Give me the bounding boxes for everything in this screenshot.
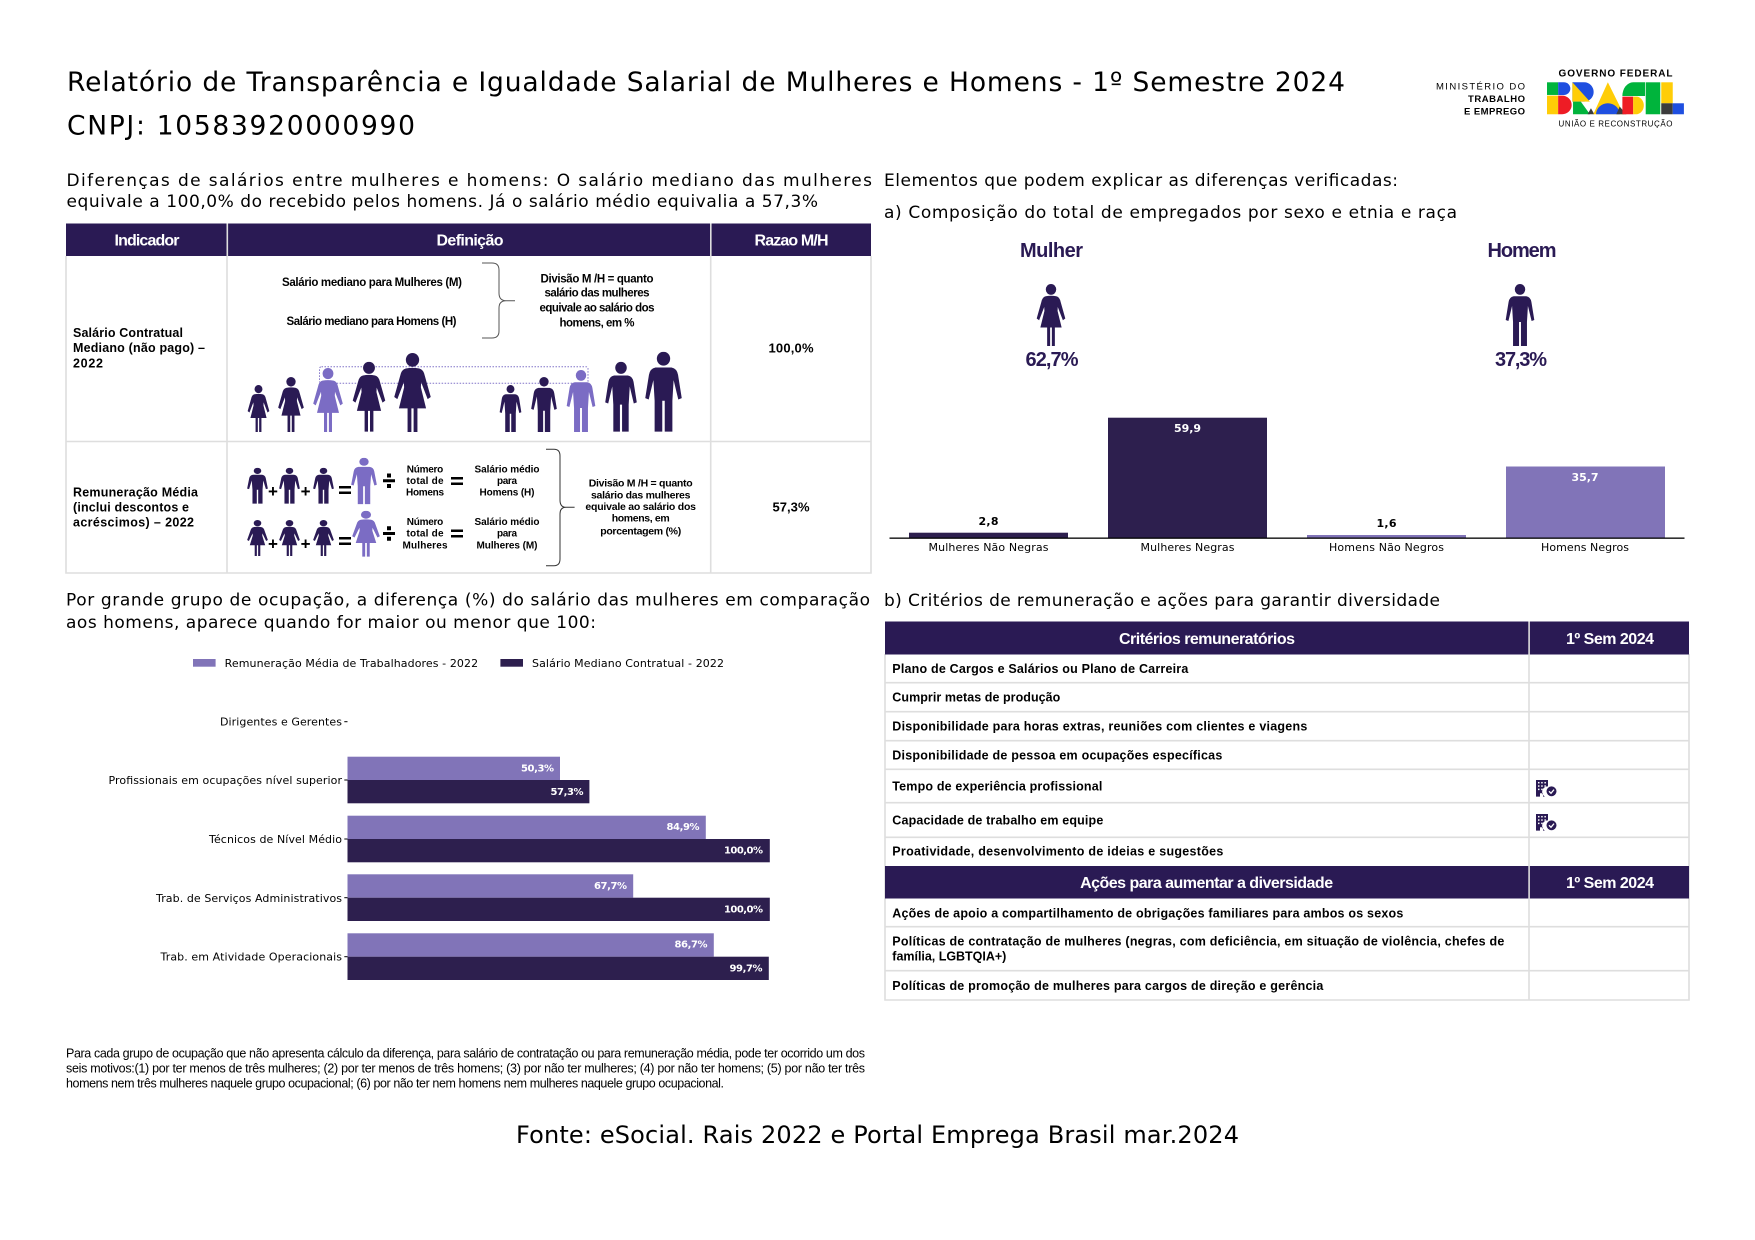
definition note	[585, 478, 696, 537]
formula: women	[247, 511, 539, 557]
header: ações para aumentar a diversidade	[885, 866, 1689, 898]
formula: men: Homens (H)	[480, 488, 534, 499]
legend	[193, 657, 724, 670]
row: remuneração média indicator: Remuneração Média	[73, 486, 199, 500]
brace	[482, 263, 515, 338]
panel: homem share: Homem	[1488, 240, 1556, 262]
header: critérios remuneratórios: Critérios remuneratórios	[1119, 631, 1295, 648]
heading: critérios: b) Critérios de remuneração e ações para garantir diversidade	[884, 591, 1440, 611]
formula: men: +	[301, 482, 311, 501]
row: salário contratual indicator: Mediano (não pago) –	[73, 341, 205, 355]
logo: ministério do trabalho e emprego: E EMPREGO	[1464, 106, 1525, 117]
row: atividade operacionais: 99,7%	[730, 963, 762, 974]
formula: men: para	[497, 476, 517, 487]
heading: por grande grupo de ocupação: Por grande grupo de ocupação, a diferença (%) do salário das mulheres em comparação	[66, 591, 870, 611]
panel: homem share	[1488, 240, 1556, 371]
row: salário contratual indicator: 2022	[73, 357, 103, 371]
criteria rows: Tempo de experiência profissional	[892, 779, 1102, 793]
chart: composition bars: Mulheres Não Negras	[928, 541, 1049, 554]
definition note: salário das mulheres	[544, 288, 650, 300]
icon: building check	[1536, 780, 1556, 797]
definition note: equivale ao salário dos	[585, 501, 696, 513]
formula: women: Mulheres (M)	[476, 540, 538, 551]
value: salário contratual: 100,0%	[768, 341, 814, 356]
definition note: homens, em %	[560, 318, 634, 330]
chart: composition bars: 2,8	[978, 515, 998, 528]
formula: men: Número	[407, 465, 443, 476]
formula: men	[247, 458, 539, 504]
row: serviços administrativos: 100,0%	[724, 905, 763, 916]
formula: women: Mulheres	[402, 540, 448, 551]
panel: mulher share: Mulher	[1020, 240, 1083, 262]
title: Relatório de Transparência e Igualdade Salarial de Mulheres e Homens - 1º Semestre 2024	[67, 67, 1345, 98]
row: serviços administrativos: 67,7%	[594, 881, 627, 892]
formula: men: total de	[406, 476, 444, 487]
panel: homem share: 37,3%	[1495, 349, 1547, 371]
formula: women: Salário médio	[474, 517, 540, 528]
brace	[546, 449, 575, 566]
row: salário contratual indicator	[73, 326, 205, 371]
icons: women by salary	[248, 353, 431, 432]
footnote	[66, 1046, 865, 1090]
definition note: salário das mulheres	[591, 490, 691, 502]
dotted median box	[320, 367, 588, 383]
criteria rows: Disponibilidade para horas extras, reuniões com clientes e viagens	[892, 720, 1307, 734]
formula: women: Número	[407, 517, 443, 528]
footnote: seis motivos:(1) por ter menos de três mulheres; (2) por ter menos de três homens; (3) por não ter mulheres; (4) por não ter homens; (5) por não ter três	[66, 1061, 865, 1075]
row: salário contratual indicator: Salário Contratual	[73, 326, 183, 340]
row: serviços administrativos	[155, 874, 770, 921]
row: dirigentes e gerentes: Dirigentes e Gerentes	[220, 716, 342, 728]
criteria rows: Proatividade, desenvolvimento de ideias e sugestões	[892, 844, 1223, 858]
definition note: Divisão M /H = quanto	[540, 274, 654, 286]
formula: women: +	[301, 534, 311, 554]
criteria rows: Plano de Cargos e Salários ou Plano de Carreira	[892, 662, 1189, 676]
formula: men: Salário médio	[474, 465, 540, 476]
row: técnicos: 84,9%	[666, 822, 700, 833]
logo: governo federal brasil: UNIÃO E RECONSTRUÇÃO	[1558, 120, 1672, 129]
header: ações para aumentar a diversidade: Ações para aumentar a diversidade	[1080, 875, 1333, 892]
heading: por grande grupo de ocupação	[66, 591, 870, 633]
definition note	[540, 274, 654, 330]
logo: ministério do trabalho e emprego: MINISTÉRIO DO	[1436, 81, 1525, 92]
table header: Razao M/H	[754, 233, 828, 250]
source: Fonte: eSocial. Rais 2022 e Portal Emprega Brasil mar.2024	[516, 1121, 1239, 1149]
formula: women: para	[497, 529, 517, 540]
heading: elementos: Elementos que podem explicar as diferenças verificadas:	[884, 171, 1398, 191]
panel: mulher share	[1020, 240, 1083, 371]
logo: governo federal brasil: GOVERNO FEDERAL	[1558, 68, 1672, 79]
action rows: Políticas de promoção de mulheres para cargos de direção e gerência	[892, 979, 1324, 993]
panel: mulher share: 62,7%	[1026, 349, 1079, 371]
panel: criteria table	[885, 622, 1689, 1000]
legend: Salário Mediano Contratual - 2022	[532, 657, 724, 670]
panel: indicator table	[66, 224, 871, 573]
icon: man	[1506, 284, 1534, 346]
row: profissionais: 50,3%	[521, 763, 554, 774]
table header: Definição	[436, 233, 504, 250]
heading: elementos: a) Composição do total de empregados por sexo e etnia e raça	[884, 203, 1457, 223]
row: técnicos	[208, 816, 770, 862]
criteria rows: Disponibilidade de pessoa em ocupações específicas	[892, 749, 1222, 763]
chart: composition bars: 35,7	[1572, 471, 1598, 484]
icon: building check	[1536, 814, 1556, 831]
intro text: diferenças de salários: equivale a 100,0% do recebido pelos homens. Já o salário médio equivalia a 57,3%	[66, 192, 818, 212]
row: técnicos: Técnicos de Nível Médio	[208, 833, 342, 846]
footnote: Para cada grupo de ocupação que não apresenta cálculo da diferença, para salário de contratação ou para remuneração média, pode ter ocorrido um dos	[66, 1046, 865, 1060]
definition note: homens, em	[612, 513, 670, 525]
row: profissionais: 57,3%	[550, 787, 584, 798]
action rows: Ações de apoio a compartilhamento de obrigações familiares para ambos os sexos	[892, 906, 1403, 920]
formula: men: +	[268, 482, 278, 501]
chart: occupation horizontal bars	[108, 657, 770, 980]
criteria rows: Capacidade de trabalho em equipe	[892, 813, 1103, 827]
title	[67, 67, 1345, 142]
title: CNPJ: 10583920000990	[67, 110, 415, 142]
salário mediano labels: Salário mediano para Mulheres (M)	[282, 277, 462, 289]
action rows: família, LGBTQIA+)	[892, 950, 1006, 964]
icon: woman	[1037, 284, 1065, 346]
action rows: Políticas de contratação de mulheres (negras, com deficiência, em situação de violência, chefes de	[892, 934, 1504, 948]
row: remuneração média indicator: (inclui descontos e	[73, 500, 189, 514]
header: ações para aumentar a diversidade: 1º Sem 2024	[1566, 875, 1654, 892]
intro text: diferenças de salários: Diferenças de salários entre mulheres e homens: O salário mediano das mulheres	[66, 171, 872, 191]
logo: ministério do trabalho e emprego: TRABALHO	[1468, 94, 1525, 105]
definition note: Divisão M /H = quanto	[589, 478, 693, 490]
salário mediano labels: Salário mediano para Homens (H)	[286, 316, 457, 328]
row: remuneração média indicator: acréscimos) – 2022	[73, 515, 194, 529]
criteria rows	[892, 662, 1307, 858]
criteria rows: Cumprir metas de produção	[892, 691, 1061, 705]
legend: Remuneração Média de Trabalhadores - 2022	[225, 657, 478, 670]
salário mediano labels	[282, 277, 462, 328]
chart: composition bars	[890, 418, 1684, 554]
action rows	[892, 906, 1504, 993]
value: remuneração média: 57,3%	[772, 500, 810, 515]
chart: composition bars: 1,6	[1376, 517, 1397, 530]
formula: men: Homens	[406, 488, 444, 499]
row: atividade operacionais: 86,7%	[674, 940, 708, 951]
heading: elementos	[884, 171, 1457, 223]
logo: governo federal brasil	[1547, 68, 1684, 129]
row: atividade operacionais: Trab. em Atividade Operacionais	[160, 950, 342, 964]
header: critérios remuneratórios	[885, 622, 1689, 654]
chart: composition bars: 59,9	[1174, 422, 1201, 435]
row: técnicos: 100,0%	[724, 846, 763, 857]
row: remuneração média indicator	[73, 486, 199, 529]
formula: women: total de	[406, 529, 444, 540]
logo: ministério do trabalho e emprego	[1436, 81, 1525, 117]
chart: composition bars: Homens Negros	[1541, 541, 1629, 554]
row: atividade operacionais	[160, 933, 769, 980]
intro text: diferenças de salários	[66, 171, 872, 212]
definition note: equivale ao salário dos	[540, 302, 654, 314]
definition note: porcentagem (%)	[600, 525, 681, 537]
row: serviços administrativos: Trab. de Serviços Administrativos	[155, 892, 342, 905]
table header	[66, 224, 871, 256]
row: profissionais	[108, 757, 589, 803]
chart: composition bars: Mulheres Negras	[1140, 541, 1235, 554]
header: critérios remuneratórios: 1º Sem 2024	[1566, 631, 1654, 648]
row: profissionais: Profissionais em ocupações nível superior	[108, 774, 342, 787]
icons: men by salary	[500, 352, 682, 432]
formula: women: +	[268, 534, 278, 554]
footnote: homens nem três mulheres naquele grupo ocupacional; (6) por não ter nem homens nem mulheres naquele grupo ocupacional.	[66, 1076, 724, 1090]
heading: por grande grupo de ocupação: aos homens, aparece quando for maior ou menor que 100:	[66, 613, 596, 633]
chart: composition bars: Homens Não Negros	[1329, 541, 1444, 554]
table header: Indicador	[114, 233, 180, 250]
